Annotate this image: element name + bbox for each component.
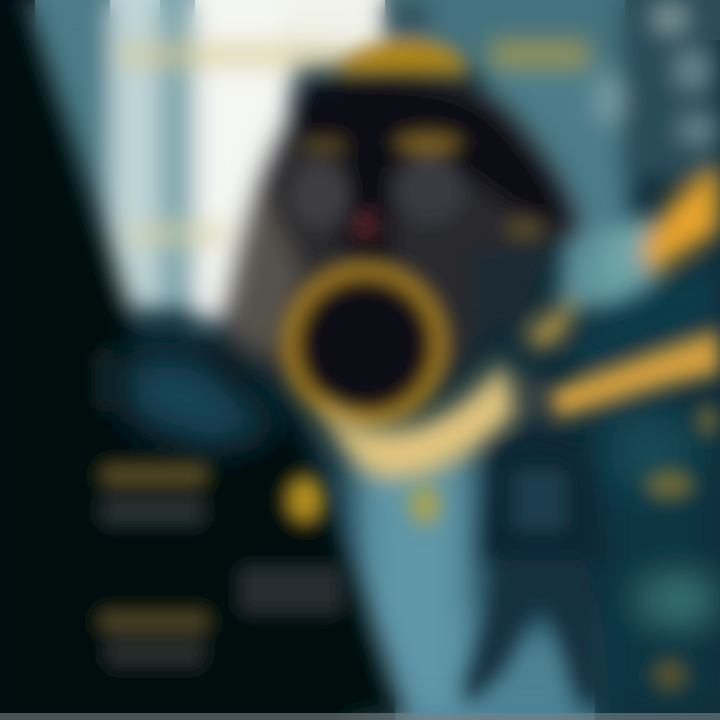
standing person [462, 374, 605, 705]
right dark teal band [570, 260, 720, 375]
small gold accents [409, 404, 718, 691]
background: upper sky and towers [20, 0, 720, 320]
figure highlights: eyes and mouth [290, 131, 545, 241]
gold ring [289, 269, 441, 421]
cream swoosh [315, 295, 580, 479]
background: right tower windows [594, 0, 720, 146]
bottom grey strip [0, 713, 720, 720]
right gold band [550, 330, 720, 420]
central dark figure [220, 70, 579, 406]
gold hat [335, 0, 470, 74]
dark teal panel highlight [120, 355, 280, 450]
background: faint gold title band [120, 40, 590, 246]
background: lower right dark teal [590, 400, 720, 720]
right orange swoosh [600, 165, 720, 300]
background: lower centre pale column [350, 450, 600, 720]
gold icon on panel [286, 476, 324, 524]
left dark building mass [0, 0, 405, 720]
left panel text rows [96, 350, 343, 668]
